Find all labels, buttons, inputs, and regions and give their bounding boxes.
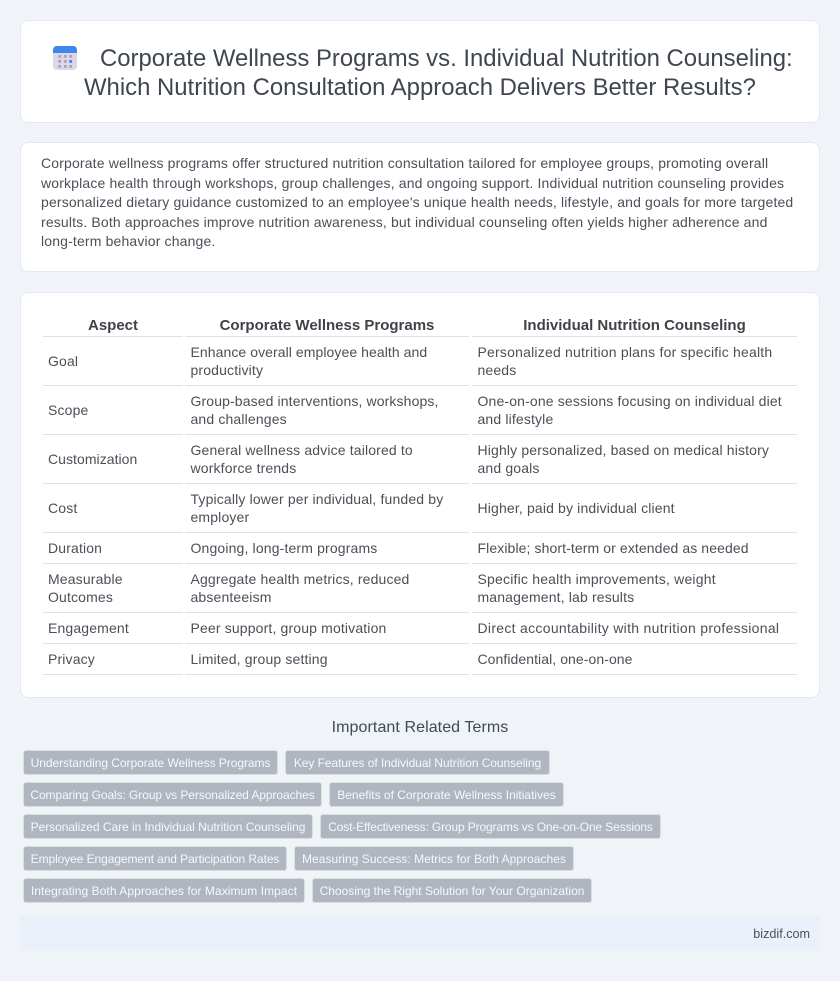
row: Privacy: Privacy xyxy=(48,651,95,667)
tag xyxy=(329,782,564,807)
panel: introduction xyxy=(20,142,820,272)
tag: Key Features of Individual Nutrition Counseling xyxy=(294,756,541,770)
row: Privacy xyxy=(48,651,633,667)
text block: introduction paragraph: results. Both approaches improve nutrition awareness, but individual counseling often yields higher adherence and xyxy=(41,214,768,230)
row: Scope: and lifestyle xyxy=(478,411,553,427)
heading: related terms: Important Related Terms xyxy=(332,719,508,736)
row: Cost: Cost xyxy=(48,500,77,516)
row: Measurable Outcomes: Specific health improvements, weight xyxy=(478,571,716,587)
heading: main title: Corporate Wellness Programs vs. Individual Nutrition Counseling: xyxy=(100,45,793,72)
row: Privacy: Limited, group setting xyxy=(190,651,328,667)
tag xyxy=(23,846,287,871)
row: Customization: General wellness advice tailored to xyxy=(190,442,413,458)
row: Duration: Ongoing, long-term programs xyxy=(190,540,377,556)
row: Measurable Outcomes: Aggregate health metrics, reduced xyxy=(190,571,409,587)
row: Goal: Personalized nutrition plans for specific health xyxy=(478,344,772,360)
row: Scope xyxy=(48,393,782,427)
tag: Personalized Care in Individual Nutrition Counseling xyxy=(31,820,305,834)
row: Cost: employer xyxy=(190,509,249,525)
table header row xyxy=(88,317,746,334)
row: Cost: Typically lower per individual, funded by xyxy=(190,491,443,507)
footer bar xyxy=(20,917,820,951)
heading: main title: Which Nutrition Consultation Approach Delivers Better Results? xyxy=(84,74,756,101)
text block: introduction paragraph: personalized dietary guidance customized to an employee's unique health needs, lifestyle, and goals for more targeted xyxy=(41,194,793,210)
tag list: related terms xyxy=(23,750,661,903)
row: Customization: and goals xyxy=(478,460,540,476)
footer source text: bizdif.com xyxy=(753,927,810,941)
row: Measurable Outcomes: management, lab results xyxy=(478,589,634,605)
tag xyxy=(294,846,574,871)
tag: Cost-Effectiveness: Group Programs vs One-on-One Sessions xyxy=(328,820,653,834)
row: Scope: and challenges xyxy=(190,411,287,427)
row: Measurable Outcomes xyxy=(48,571,716,605)
row: Goal: needs xyxy=(478,362,516,378)
heading: main title xyxy=(84,45,793,101)
row: Goal: Goal xyxy=(48,353,78,369)
row: Cost xyxy=(48,491,675,525)
tag: Integrating Both Approaches for Maximum Impact xyxy=(31,884,297,898)
table header row: Corporate Wellness Programs xyxy=(220,317,434,334)
row: Customization xyxy=(48,442,769,476)
row: Measurable Outcomes: absenteeism xyxy=(190,589,272,605)
tag xyxy=(23,750,278,775)
row: Customization: Customization xyxy=(48,451,137,467)
row: Cost: Higher, paid by individual client xyxy=(478,500,675,516)
row: Privacy: Confidential, one-on-one xyxy=(478,651,633,667)
row: Duration: Flexible; short-term or extended as needed xyxy=(478,540,749,556)
tag xyxy=(23,814,313,839)
row: Measurable Outcomes: Outcomes xyxy=(48,589,113,605)
text block: introduction paragraph xyxy=(41,155,793,249)
row: Scope: Group-based interventions, workshops, xyxy=(190,393,439,409)
row: Scope: Scope xyxy=(48,402,88,418)
row: Goal xyxy=(48,344,772,378)
row: Duration xyxy=(48,540,749,556)
row: Goal: productivity xyxy=(190,362,263,378)
icon: calendar xyxy=(53,46,77,70)
tag xyxy=(312,878,592,903)
tag xyxy=(320,814,661,839)
tag xyxy=(23,878,305,903)
table header row: Aspect xyxy=(88,317,138,334)
tag xyxy=(285,750,550,775)
row: Scope: One-on-one sessions focusing on individual diet xyxy=(478,393,782,409)
row: Measurable Outcomes: Measurable xyxy=(48,571,123,587)
text block: introduction paragraph: Corporate wellness programs offer structured nutrition consultation tailored for employee groups, promoting overall xyxy=(41,155,768,171)
table header row: Individual Nutrition Counseling xyxy=(523,317,746,334)
row: Goal: Enhance overall employee health and xyxy=(190,344,427,360)
row: Customization: workforce trends xyxy=(190,460,296,476)
tag xyxy=(23,782,322,807)
tag: Understanding Corporate Wellness Programs xyxy=(31,756,270,770)
table: comparison of approaches xyxy=(43,317,797,675)
text block: introduction paragraph: long-term behavior change. xyxy=(41,233,215,249)
tag: Benefits of Corporate Wellness Initiatives xyxy=(337,788,556,802)
panel: comparison table xyxy=(20,292,820,698)
row: Engagement xyxy=(48,620,779,636)
row: Engagement: Peer support, group motivation xyxy=(190,620,386,636)
tag: Choosing the Right Solution for Your Organization xyxy=(320,884,584,898)
row: Engagement: Direct accountability with nutrition professional xyxy=(478,620,779,636)
row: Duration: Duration xyxy=(48,540,102,556)
tag: Comparing Goals: Group vs Personalized Approaches xyxy=(30,788,315,802)
row: Customization: Highly personalized, based on medical history xyxy=(478,442,769,458)
panel: title header xyxy=(20,20,820,123)
tag: Measuring Success: Metrics for Both Approaches xyxy=(302,852,566,866)
tag: Employee Engagement and Participation Rates xyxy=(31,852,279,866)
row: Engagement: Engagement xyxy=(48,620,129,636)
text block: introduction paragraph: workplace health through workshops, group challenges, and ongoing support. Individual nutrition counseling provides xyxy=(41,174,784,190)
